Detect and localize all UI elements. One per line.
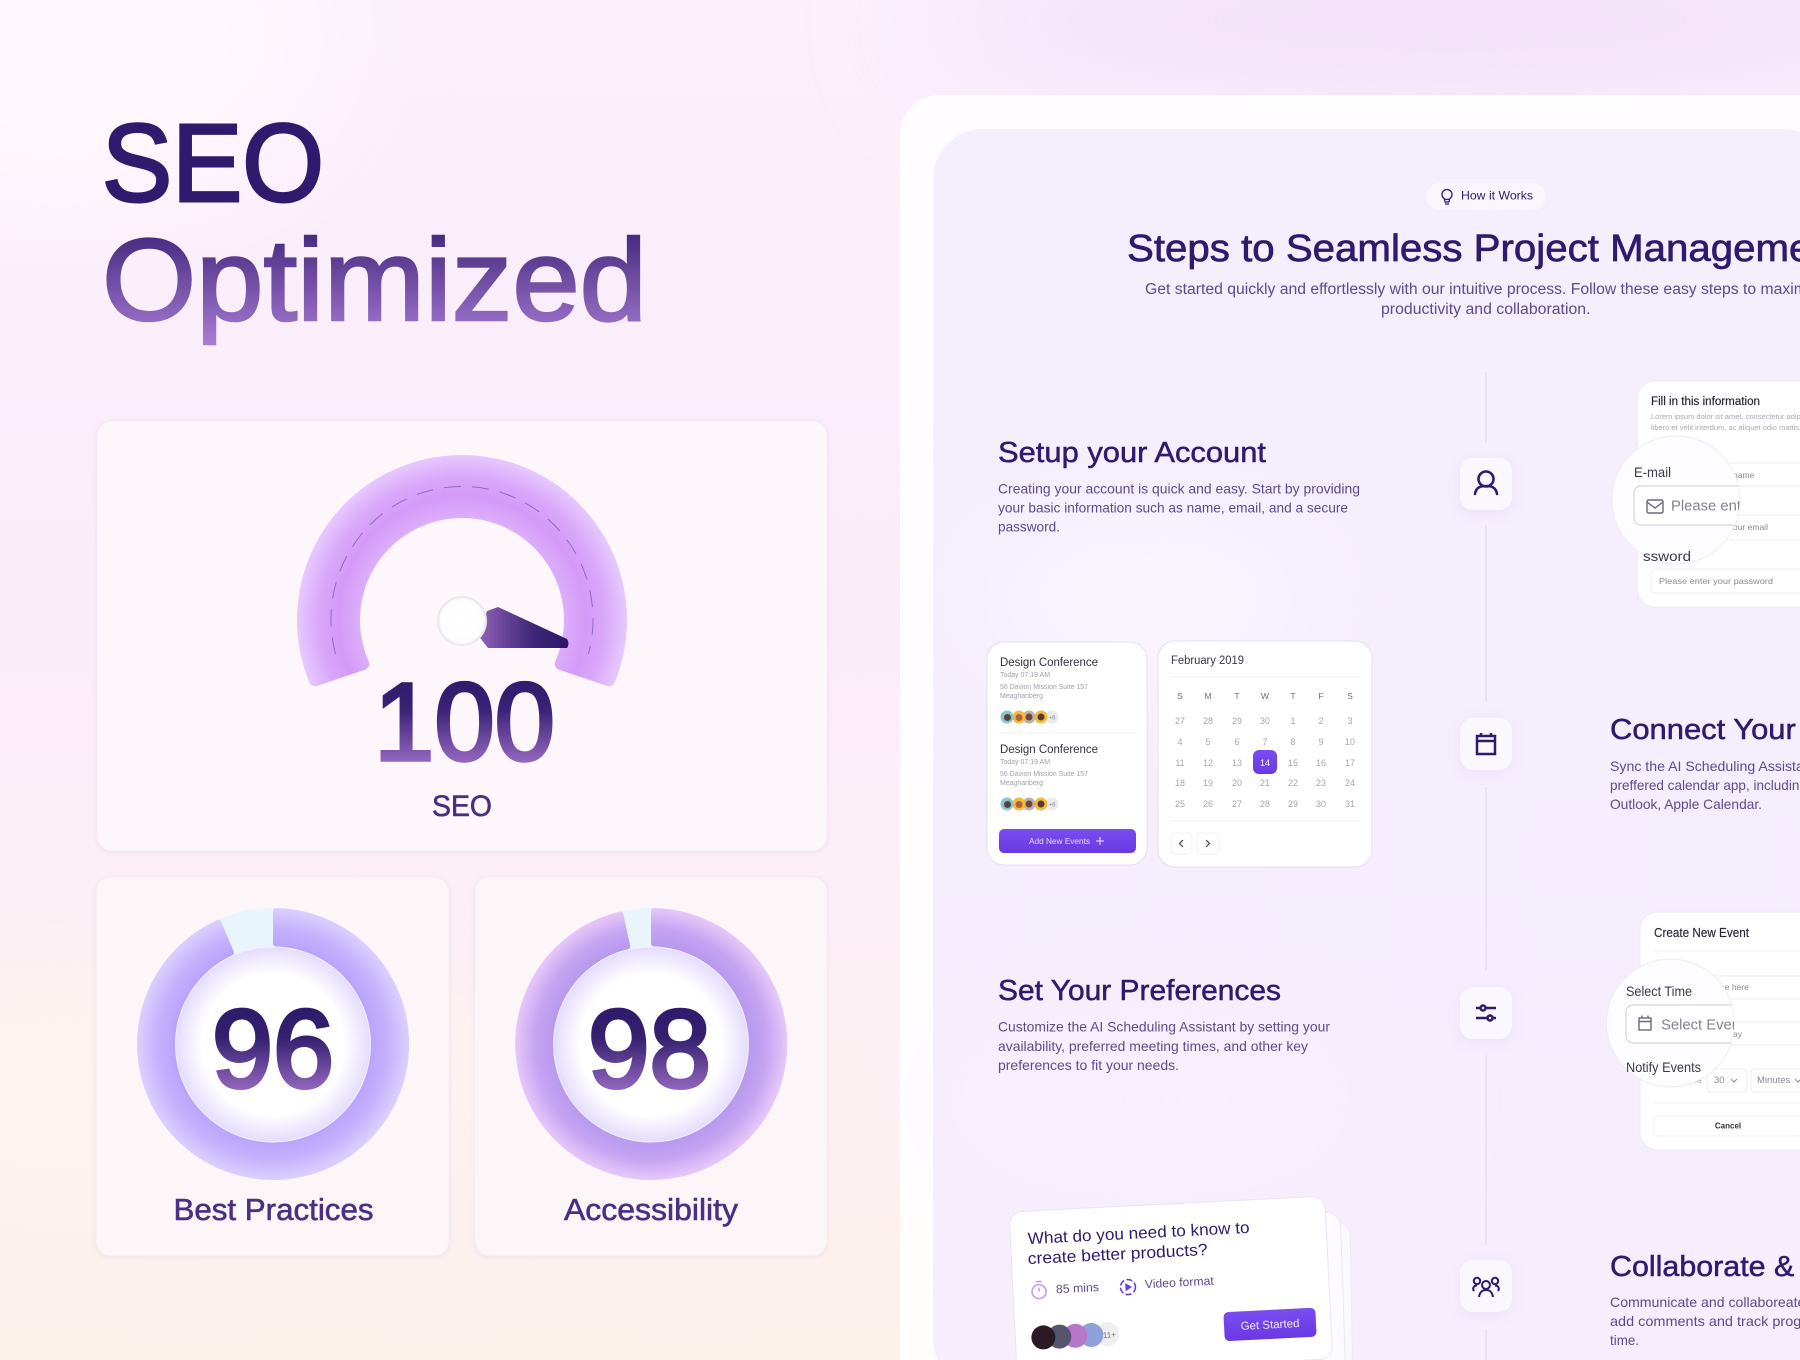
- button: add new events: Add New Events: [1029, 836, 1090, 846]
- donut: inner disc: [176, 947, 370, 1142]
- badge: How it Works: [1426, 183, 1546, 210]
- form card: Create New Event: ne: [1692, 1075, 1702, 1085]
- panel: question card stack: [1009, 1196, 1353, 1360]
- form card: Create New Event: [1606, 912, 1800, 1150]
- step: Set Your Preferences: preferences to fit your needs.: [998, 1057, 1179, 1073]
- calendar dates: 6: [1234, 737, 1240, 747]
- step: Set Your Preferences: availability, preferred meeting times, and other key: [998, 1038, 1308, 1054]
- form card: Fill in this information: libero et velit interdum, ac aliquet odio mattis.: [1651, 423, 1800, 432]
- form card: Fill in this information: Please enter your password: [1659, 576, 1773, 586]
- password label: ssword: [1643, 549, 1691, 564]
- event 2: Meaghanberg: [1000, 780, 1043, 787]
- calendar dates: 16: [1316, 758, 1326, 768]
- event 1: 56 Davion Mission Suite 157: [1000, 684, 1088, 691]
- Best Practices label: Best Practices: [174, 1192, 374, 1227]
- form card: Fill in this information: [1612, 381, 1800, 607]
- calendar weekdays: S: [1177, 691, 1183, 701]
- calendar dates: 24: [1345, 778, 1355, 788]
- heading: steps: Steps to Seamless Project Management: [1127, 228, 1800, 270]
- event 2: Today 07:19 AM: [1000, 759, 1050, 766]
- event 1: Today 07:19 AM: [1000, 672, 1050, 679]
- donut: progress ring: [140, 911, 406, 1177]
- calendar dates: 27: [1175, 716, 1185, 726]
- SEO score: 100: [374, 661, 555, 784]
- calendar dates: 27: [1232, 799, 1242, 809]
- calendar dates: [1175, 716, 1355, 809]
- form card: Fill in this information: name: [1733, 470, 1755, 480]
- step: Setup your Account: password.: [998, 518, 1060, 534]
- badge: How it Works: How it Works: [1461, 188, 1533, 202]
- calendar dates: 20: [1232, 778, 1242, 788]
- calendar dates: 8: [1290, 737, 1296, 747]
- gauge arc: [303, 461, 621, 680]
- icon: sliders: [1460, 987, 1512, 1039]
- gauge knob: [437, 596, 487, 646]
- calendar dates: 4: [1177, 737, 1183, 747]
- calendar dates: 30: [1316, 799, 1326, 809]
- magnifier lens: select time: Select Time: [1626, 984, 1692, 999]
- form card: Fill in this information: our email: [1733, 522, 1768, 532]
- calendar dates: 11: [1175, 758, 1185, 768]
- calendar dates: 18: [1175, 778, 1185, 788]
- magnifier lens: select time: [1607, 958, 1735, 1088]
- step: Setup your Account: your basic information such as name, email, and a secure: [998, 500, 1348, 516]
- calendar dates: 2: [1318, 716, 1324, 726]
- question card: Video format: [1144, 1274, 1215, 1291]
- step: Setup your Account: [998, 437, 1360, 534]
- calendar dates: 21: [1260, 778, 1270, 788]
- icon: team: [1460, 1260, 1512, 1312]
- magnifier lens: select time: Select Event: [1661, 1018, 1744, 1034]
- step: Connect Your Calendar: [1610, 714, 1800, 812]
- magnifier lens: select time: Notify Events: [1626, 1060, 1701, 1075]
- button: get started: Get Started: [1240, 1318, 1300, 1333]
- form card: Fill in this information: Fill in this information: [1651, 396, 1760, 408]
- calendar weekdays: T: [1290, 691, 1296, 701]
- form card: Create New Event: ne here: [1720, 982, 1749, 992]
- calendar dates: 15: [1288, 758, 1298, 768]
- calendar dates: 25: [1175, 799, 1185, 809]
- magnifier lens: e-mail: E-mail: [1634, 464, 1671, 480]
- calendar dates: 30: [1260, 716, 1270, 726]
- icon: light bulb: [1442, 190, 1452, 204]
- event 1: [1000, 657, 1098, 724]
- panel: calendar: [1158, 641, 1372, 867]
- calendar dates: 9: [1318, 737, 1324, 747]
- calendar dates: 28: [1260, 799, 1270, 809]
- step: Collaborate & Share: [1610, 1251, 1800, 1348]
- title: [102, 102, 647, 345]
- calendar dates: 31: [1345, 799, 1355, 809]
- step: Set Your Preferences: Set Your Preferences: [998, 975, 1281, 1007]
- avatars: 11+: [1103, 1330, 1116, 1340]
- donut: gap: [534, 927, 768, 1161]
- calendar dates: 14: [1260, 758, 1270, 768]
- panel: SEO gauge card: [97, 421, 827, 851]
- event 2: 56 Davion Mission Suite 157: [1000, 771, 1088, 778]
- text: intro: Get started quickly and effortlessly with our intuitive process. Follow these easy steps to maximize: [1145, 281, 1800, 298]
- calendar weekdays: [1177, 691, 1353, 701]
- calendar highlight: [1253, 750, 1277, 774]
- form card: Create New Event: Create New Event: [1654, 926, 1749, 940]
- calendar dates: 1: [1290, 716, 1296, 726]
- event 2: [1000, 744, 1098, 810]
- gauge needle: [479, 607, 568, 648]
- panel: event list: [987, 642, 1147, 865]
- calendar dates: 5: [1205, 737, 1211, 747]
- donut: gap: [156, 927, 390, 1161]
- magnifier lens: e-mail: Please enter: [1671, 498, 1754, 514]
- icon: user: [1460, 458, 1512, 510]
- event 1: Meaghanberg: [1000, 693, 1043, 700]
- SEO label: SEO: [432, 790, 492, 823]
- panel: white frame: [900, 95, 1800, 1360]
- score 98: 98: [588, 988, 711, 1111]
- text: intro: [1145, 281, 1800, 318]
- step: Collaborate & Share: time.: [1610, 1332, 1639, 1348]
- calendar dates: 3: [1347, 716, 1353, 726]
- text: intro: productivity and collaboration.: [1381, 301, 1590, 318]
- avatars: [1031, 1322, 1120, 1350]
- donut: inner disc: [554, 947, 748, 1142]
- calendar dates: 12: [1203, 758, 1213, 768]
- event 1: Design Conference: [1000, 657, 1098, 669]
- donut: progress ring: [518, 911, 784, 1177]
- step: Setup your Account: Creating your account is quick and easy. Start by providing: [998, 480, 1360, 496]
- step: Setup your Account: Setup your Account: [998, 437, 1266, 469]
- Accessibility label: Accessibility: [564, 1192, 739, 1227]
- timeline: [1485, 372, 1487, 1360]
- calendar dates: 28: [1203, 716, 1213, 726]
- gauge dashed track: [331, 486, 593, 654]
- form card: Create New Event: Minutes: [1757, 1075, 1791, 1086]
- form card: Create New Event: ay: [1733, 1029, 1743, 1039]
- title: SEO: [102, 102, 324, 225]
- calendar weekdays: T: [1234, 691, 1240, 701]
- form card: Create New Event: 30: [1714, 1075, 1725, 1086]
- icon: play: [1120, 1279, 1136, 1295]
- icon: calendar: [1460, 718, 1512, 770]
- magnifier lens: e-mail: [1612, 436, 1740, 564]
- calendar weekdays: M: [1204, 691, 1212, 701]
- step: Connect Your Calendar: Outlook, Apple Calendar.: [1610, 796, 1762, 812]
- form card: Create New Event: Cancel: [1715, 1122, 1741, 1130]
- icon: timer: [1032, 1281, 1046, 1299]
- calendar dates: 23: [1316, 778, 1326, 788]
- score 96: 96: [212, 988, 334, 1111]
- step: Set Your Preferences: Customize the AI Scheduling Assistant by setting your: [998, 1018, 1330, 1034]
- question card: [1009, 1196, 1333, 1360]
- calendar dates: 13: [1232, 758, 1242, 768]
- event 2: Design Conference: [1000, 744, 1098, 756]
- calendar dates: 17: [1345, 758, 1355, 768]
- title: Optimized: [102, 215, 647, 345]
- step: Set Your Preferences: [998, 975, 1330, 1073]
- question card: What do you need to know to: [1027, 1219, 1250, 1248]
- calendar dates: 19: [1203, 778, 1213, 788]
- calendar nav buttons: [1171, 833, 1219, 854]
- calendar dates: 26: [1203, 799, 1213, 809]
- calendar weekdays: F: [1318, 691, 1324, 701]
- event 2: +6: [1049, 802, 1056, 808]
- calendar dates: 7: [1262, 737, 1268, 747]
- question card: 85 mins: [1056, 1280, 1099, 1296]
- question card: create better products?: [1027, 1241, 1208, 1268]
- panel: calendar: February 2019: [1171, 655, 1244, 667]
- calendar dates: 29: [1232, 716, 1242, 726]
- calendar dates: 10: [1345, 737, 1355, 747]
- button: add new events: [999, 829, 1136, 853]
- calendar dates: 22: [1288, 778, 1298, 788]
- panel: Best Practices card: [96, 877, 449, 1256]
- button: get started: [1223, 1308, 1317, 1341]
- calendar dates: 29: [1288, 799, 1298, 809]
- event 1: +6: [1049, 716, 1056, 722]
- calendar weekdays: S: [1347, 691, 1353, 701]
- panel: Accessibility card: [475, 877, 827, 1256]
- calendar weekdays: W: [1261, 691, 1269, 701]
